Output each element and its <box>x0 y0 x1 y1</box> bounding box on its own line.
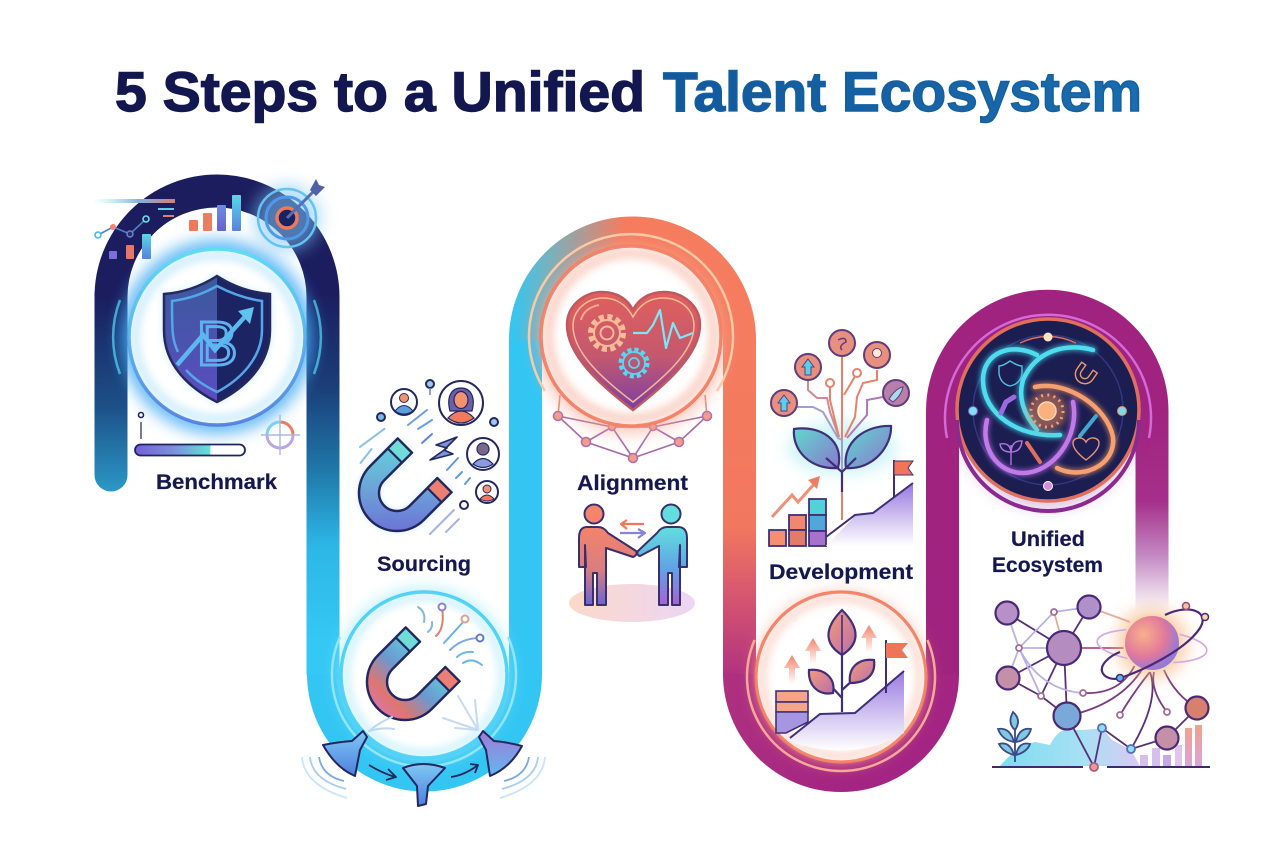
icon: target with arrow <box>253 179 325 252</box>
label: Alignment: Alignment <box>577 472 688 495</box>
icon: lightning bolt <box>430 437 457 460</box>
label: Development: Development <box>769 561 913 584</box>
icon: field lines <box>369 604 484 731</box>
network links <box>1007 607 1197 767</box>
icon: idea nodes <box>771 330 909 416</box>
small white nodes <box>1016 609 1170 718</box>
icon: ring nodes <box>968 332 1126 490</box>
title: 5 Steps to a Unified <box>115 60 645 123</box>
network nodes <box>996 596 1208 750</box>
icon: mini step symbols <box>999 361 1099 465</box>
label: Sourcing: Sourcing <box>377 553 471 576</box>
icon: leaves <box>794 428 839 468</box>
winding ribbon path <box>111 191 1152 776</box>
step 1: Benchmark <box>95 179 325 494</box>
label: Unified Ecosystem <box>992 528 1103 577</box>
motion lines <box>356 410 470 534</box>
leaf glow <box>788 422 896 474</box>
step 5: Unified Ecosystem <box>945 315 1210 771</box>
icon: shield with arrow: B <box>196 310 238 379</box>
small cyan nodes <box>1098 724 1135 753</box>
icon: top magnet <box>343 439 451 547</box>
icon: plant climbing a slope <box>776 610 908 750</box>
ground, hills and bars <box>992 725 1210 767</box>
icon: small plant <box>998 712 1031 762</box>
icon: slope with flag <box>826 460 913 546</box>
icon: two people shaking hands <box>569 504 695 622</box>
illustration: magnet attracting people <box>343 380 499 547</box>
step 4: Development <box>747 330 935 771</box>
icon: progress gauge <box>135 412 245 456</box>
medallion: alignment circle <box>529 234 733 434</box>
label: Unified Ecosystem: Unified <box>1011 528 1085 551</box>
planet glow and orbits <box>1096 602 1208 682</box>
medallion: sourcing circle <box>332 587 516 767</box>
icon: interlocking neon rings <box>983 348 1113 473</box>
illustration: growth tree <box>769 330 913 546</box>
medallion: benchmark circle <box>113 240 321 434</box>
motion waves <box>302 757 545 798</box>
label: Unified Ecosystem: Ecosystem <box>992 554 1103 577</box>
icon: connected net <box>554 395 712 462</box>
label: Benchmark: Benchmark <box>156 471 277 494</box>
icon: central sun <box>1027 391 1067 431</box>
illustration: connected network and planet <box>992 596 1210 771</box>
icon: circuit branches <box>784 357 883 520</box>
step 2: Sourcing <box>302 380 545 806</box>
medallion: unified circle <box>945 315 1151 511</box>
icon: stacked bars <box>769 499 826 546</box>
medallion: development circle <box>747 591 935 771</box>
icon: funnels and flow arrows <box>323 731 522 806</box>
step 3: Alignment <box>529 234 733 622</box>
ground node <box>1090 763 1098 771</box>
icon: lower magnet <box>351 628 459 736</box>
title <box>115 60 1142 123</box>
icon: candidate avatars <box>377 380 499 509</box>
icon: bar charts and trend line <box>95 195 241 259</box>
icon: shield with arrow <box>163 275 271 403</box>
icon: heart with gears and pulse <box>567 292 700 410</box>
icon: growth arrow <box>772 476 820 517</box>
title: Talent Ecosystem <box>663 60 1142 123</box>
icon: crosshair <box>261 415 300 455</box>
